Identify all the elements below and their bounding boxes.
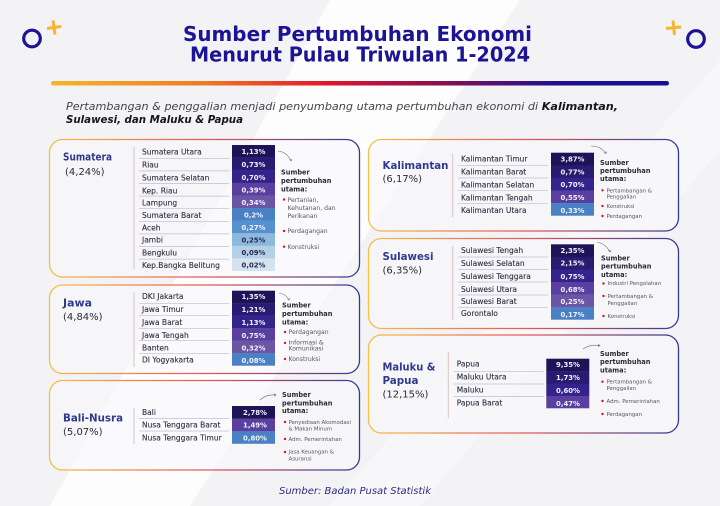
intro text <box>66 101 618 126</box>
arrow <box>260 394 276 400</box>
sources: Kalimantan: Konstruksi <box>606 204 634 210</box>
source line: Sumber: Badan Pusat Statistik <box>279 486 431 497</box>
table: Bali-Nusra: Nusa Tenggara Barat <box>142 421 221 430</box>
table: Kalimantan: Kalimantan Barat <box>461 168 526 177</box>
sources: Bali-Nusra: Asuransi <box>288 457 312 463</box>
table: Bali-Nusra: 2,78% <box>243 409 267 417</box>
heading: Sulawesi: (6,35%) <box>382 266 422 276</box>
table: Sumatera: Kep.Bangka Belitung <box>142 261 220 270</box>
table: Sumatera: Sumatera Barat <box>142 211 201 220</box>
heading: Sumatera <box>63 152 112 178</box>
arrow <box>278 151 292 161</box>
arrow <box>591 146 606 154</box>
panel: Bali-Nusra <box>50 380 360 470</box>
sources: Jawa: utama: <box>282 318 308 326</box>
sources: Kalimantan: Pertambangan & <box>606 188 653 194</box>
sources: Kalimantan: Penggalian <box>606 194 636 200</box>
heading: Maluku & Papua <box>382 362 436 400</box>
sources: Sumatera <box>281 168 336 251</box>
sources: Jawa: Komunikasi <box>288 345 324 352</box>
table: Jawa: 0,08% <box>242 357 266 365</box>
table: Sulawesi: Sulawesi Utara <box>461 285 517 294</box>
table: Jawa: 1,13% <box>242 319 266 327</box>
table: Bali-Nusra: 0,80% <box>243 435 267 443</box>
sources: Sulawesi: Penggalian <box>608 301 637 307</box>
sources: Sumatera: Sumber <box>281 168 311 176</box>
table: Sumatera: 1,13% <box>242 148 266 156</box>
sources: Sumatera: Kehutanan, dan <box>288 205 336 212</box>
sources: Maluku & Papua: Penggalian <box>606 386 636 392</box>
icon: ring and plus left <box>24 20 61 47</box>
table: Jawa: Banten <box>142 343 169 352</box>
table: Bali-Nusra: 1,49% <box>243 422 267 430</box>
table: Sulawesi: Sulawesi Tengah <box>461 246 523 255</box>
table: Sulawesi: Sulawesi Barat <box>461 297 517 306</box>
sources: Kalimantan <box>600 159 653 220</box>
table: Sulawesi: 0,75% <box>561 273 585 281</box>
intro text: Sulawesi, dan Maluku & Papua <box>66 114 243 126</box>
table: Jawa: 0,32% <box>242 344 266 352</box>
title <box>183 22 532 66</box>
arrow <box>583 344 600 349</box>
sources: Kalimantan: utama: <box>600 175 626 183</box>
table: Kalimantan: 3,87% <box>561 156 585 164</box>
table: Bali-Nusra: Bali <box>142 408 156 417</box>
table: Jawa: Jawa Barat <box>141 318 182 327</box>
sources: Maluku & Papua: utama: <box>600 366 626 374</box>
table: Sulawesi: Gorontalo <box>461 309 498 318</box>
table: Sumatera: 0,34% <box>242 199 266 207</box>
sources: Jawa <box>282 302 333 363</box>
table: Sumatera: Kep. Riau <box>142 186 178 195</box>
icon: ring and plus right <box>666 20 704 47</box>
table: Jawa <box>134 291 275 367</box>
table: Jawa: Jawa Tengah <box>141 331 189 340</box>
sources: Sumatera: Perikanan <box>288 213 318 220</box>
sources: Jawa: Konstruksi <box>288 356 320 363</box>
sources: Sumatera: Perdagangan <box>288 228 328 235</box>
table: Kalimantan: 0,33% <box>561 207 585 215</box>
table: Sumatera: Jambi <box>141 236 163 245</box>
table: Sumatera: 0,27% <box>242 224 266 232</box>
sources: Sulawesi: Pertambangan & <box>608 294 654 300</box>
heading: Maluku & Papua: (12,15%) <box>382 390 429 400</box>
heading: Jawa: Jawa <box>62 298 92 310</box>
heading: Kalimantan: (6,17%) <box>382 174 422 185</box>
sources: Kalimantan: Perdagangan <box>606 214 642 220</box>
table: Sumatera: Bengkulu <box>142 248 177 257</box>
table: Kalimantan: 0,70% <box>561 181 585 189</box>
table: Sulawesi: 0,17% <box>561 311 585 319</box>
sources: Maluku & Papua <box>600 350 660 418</box>
table: Sumatera: Riau <box>142 160 159 169</box>
table: Jawa: Jawa Timur <box>141 305 184 314</box>
table: Maluku & Papua: Papua <box>457 359 480 368</box>
panel: Kalimantan <box>368 140 678 231</box>
sources: Bali-Nusra: Jasa Keuangan & <box>288 450 335 456</box>
sources: Sumatera: utama: <box>281 186 307 194</box>
table: Maluku & Papua <box>448 352 589 418</box>
sources: Maluku & Papua: Perdagangan <box>606 412 642 418</box>
table: Jawa: DI Yogyakarta <box>142 355 194 364</box>
sources: Sumatera: Konstruksi <box>288 244 319 251</box>
sources: Sulawesi: Konstruksi <box>608 314 635 320</box>
table: Sumatera <box>134 145 275 271</box>
table: Kalimantan: Kalimantan Timur <box>461 155 528 164</box>
heading: Maluku & Papua: Maluku & <box>382 362 436 374</box>
sources: Jawa: pertumbuhan <box>282 310 333 318</box>
sources: Jawa: Perdagangan <box>288 329 329 336</box>
sources: Kalimantan: pertumbuhan <box>600 167 651 175</box>
table: Sumatera: 0,39% <box>242 186 266 194</box>
sources: Maluku & Papua: pertumbuhan <box>600 358 651 366</box>
intro text: Pertambangan & penggalian menjadi penyumbang utama pertumbuhan ekonomi di Kalimantan, <box>66 101 618 113</box>
panel: Jawa <box>50 285 360 374</box>
heading: Jawa <box>62 298 103 323</box>
sources: Maluku & Papua: Sumber <box>600 350 630 358</box>
table: Sulawesi: 0,68% <box>561 286 585 294</box>
heading: Jawa: (4,84%) <box>63 312 103 323</box>
table: Sulawesi <box>453 244 594 320</box>
table: Sumatera: Aceh <box>142 223 161 232</box>
arrow <box>597 242 611 252</box>
table: Jawa: 1,35% <box>242 293 266 301</box>
table: Sulawesi: 2,15% <box>561 260 585 268</box>
heading: Sumatera: (4,24%) <box>65 167 105 178</box>
table: Bali-Nusra: Nusa Tenggara Timur <box>142 434 223 443</box>
table: Jawa: 0,75% <box>242 332 266 340</box>
sources: Maluku & Papua: Adm. Pemerintahan <box>606 399 660 405</box>
table: Sumatera: 0,73% <box>242 161 266 169</box>
arrow <box>279 293 290 300</box>
heading: Bali-Nusra <box>63 413 123 438</box>
table: Maluku & Papua: 9,35% <box>556 361 580 369</box>
table: Kalimantan: Kalimantan Selatan <box>461 180 534 189</box>
sources: Jawa: Informasi & <box>288 340 324 346</box>
heading: Bali-Nusra: (5,07%) <box>63 427 103 438</box>
table: Maluku & Papua: 1,73% <box>556 374 580 382</box>
sources: Bali-Nusra: utama: <box>282 407 308 415</box>
table: Sumatera: 0,25% <box>242 236 266 244</box>
sources: Bali-Nusra: Sumber <box>282 391 312 399</box>
heading: Kalimantan: Kalimantan <box>382 160 448 172</box>
table: Kalimantan <box>453 153 594 217</box>
sources: Kalimantan: Sumber <box>600 159 630 167</box>
table: Jawa: DKI Jakarta <box>142 292 184 301</box>
sources: Sulawesi <box>601 254 661 320</box>
sources: Bali-Nusra: Adm. Pemerintahan <box>288 437 342 443</box>
table: Kalimantan: 0,55% <box>561 194 585 202</box>
sources: Jawa: Sumber <box>282 302 312 310</box>
table: Maluku & Papua: Maluku <box>457 385 484 394</box>
panel: Sumatera <box>50 140 360 277</box>
sources: Sulawesi: utama: <box>601 271 627 279</box>
table: Maluku & Papua: 0,60% <box>556 387 580 395</box>
table: Sulawesi: 0,25% <box>561 298 585 306</box>
sources: Sumatera: pertumbuhan <box>281 177 332 185</box>
table: Maluku & Papua: Maluku Utara <box>457 372 507 381</box>
table: Sulawesi: 2,35% <box>561 247 585 255</box>
table: Sumatera: Lampung <box>142 199 177 208</box>
sources: Sulawesi: pertumbuhan <box>601 262 652 270</box>
sources: Sulawesi: Industri Pengolahan <box>608 281 661 287</box>
heading: Sulawesi: Sulawesi <box>382 251 434 263</box>
table: Sulawesi: Sulawesi Tenggara <box>461 272 531 281</box>
table: Kalimantan: Kalimantan Utara <box>461 206 527 215</box>
panel: Sulawesi <box>368 238 678 328</box>
sources: Bali-Nusra: & Makan Minum <box>288 427 332 433</box>
table: Sumatera: Sumatera Utara <box>142 147 202 156</box>
table: Sulawesi: Sulawesi Selatan <box>461 259 525 268</box>
heading: Kalimantan <box>382 160 448 185</box>
table: Sumatera: 0,2% <box>244 212 263 220</box>
sources: Bali-Nusra: Penyediaan Akomodasi <box>288 420 351 426</box>
sources: Sulawesi: Sumber <box>601 254 631 262</box>
table: Maluku & Papua: 0,47% <box>556 400 580 408</box>
heading: Sulawesi <box>382 251 434 276</box>
heading: Bali-Nusra: Bali-Nusra <box>63 413 123 425</box>
table: Kalimantan: Kalimantan Tengah <box>461 193 533 202</box>
gradient divider bar <box>51 81 669 86</box>
table: Sumatera: 0,70% <box>242 174 266 182</box>
title: Menurut Pulau Triwulan 1-2024 <box>190 42 530 66</box>
table: Bali-Nusra <box>134 406 275 444</box>
sources: Bali-Nusra <box>282 391 351 463</box>
table: Kalimantan: 0,77% <box>561 168 585 176</box>
heading: Maluku & Papua: Papua <box>382 375 418 387</box>
sources: Bali-Nusra: pertumbuhan <box>282 399 333 407</box>
panel: Maluku & Papua <box>368 335 678 433</box>
title: Sumber Pertumbuhan Ekonomi <box>183 22 532 46</box>
table: Maluku & Papua: Papua Barat <box>457 399 502 408</box>
heading: Sumatera: Sumatera <box>63 152 112 164</box>
sources: Sumatera: Pertanian, <box>288 197 318 204</box>
table: Jawa: 1,21% <box>242 306 266 314</box>
table: Sumatera: 0,02% <box>242 262 266 270</box>
table: Sumatera: Sumatera Selatan <box>142 173 210 182</box>
table: Sumatera: 0,09% <box>242 249 266 257</box>
sources: Maluku & Papua: Pertambangan & <box>606 380 653 386</box>
